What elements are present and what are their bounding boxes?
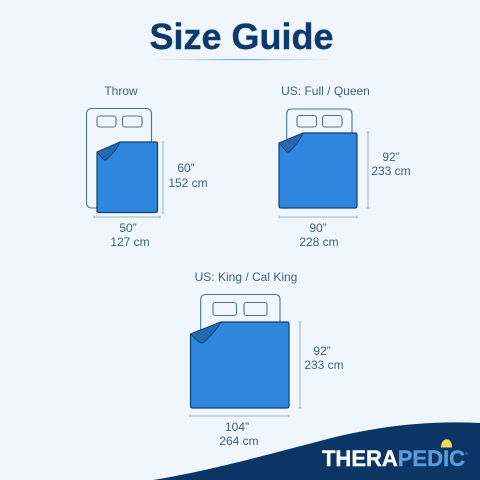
king height dimension: 92” [313,344,331,358]
full queen height dimension: 233 cm [371,164,411,178]
throw height dimension: 60” [177,161,195,175]
full queen blanket [279,133,357,208]
king bed outline [201,294,280,330]
throw blanket [97,142,158,212]
throw height dimension [162,142,208,213]
logo [322,439,468,471]
logo sun [441,439,452,448]
full queen bed outline [287,109,352,140]
full queen pillows [297,116,342,127]
full queen width dimension [279,216,357,249]
king blanket [190,322,289,408]
throw bed outline [86,108,152,208]
panel: king [190,270,344,448]
king blanket fold [190,322,221,343]
throw width dimension: 127 cm [110,235,150,249]
full queen label: US: Full / Queen [281,84,370,98]
panel: throw [86,84,208,249]
full queen width dimension: 228 cm [299,235,339,249]
logo wordmark: THERAPEDIC [322,446,465,471]
king label: US: King / Cal King [195,270,297,284]
king pillows [213,302,267,316]
king width dimension: 264 cm [219,434,259,448]
panel: full queen [279,84,411,249]
king height dimension [298,322,344,408]
throw label: Throw [104,84,138,98]
full queen width dimension: 90” [309,221,327,235]
title underline [152,59,332,60]
king width dimension [190,414,289,448]
title: Size Guide [150,16,334,57]
full queen blanket fold [279,133,303,152]
king height dimension: 233 cm [304,358,344,372]
footer wave [153,422,480,480]
throw blanket fold [97,142,120,160]
logo registered mark: ® [465,451,468,456]
throw height dimension: 152 cm [168,176,208,190]
full queen height dimension [366,132,411,208]
throw pillows [97,116,142,127]
full queen height dimension: 92” [382,150,400,164]
king width dimension: 104” [225,420,249,434]
throw width dimension [94,216,160,249]
throw width dimension: 50” [119,221,137,235]
